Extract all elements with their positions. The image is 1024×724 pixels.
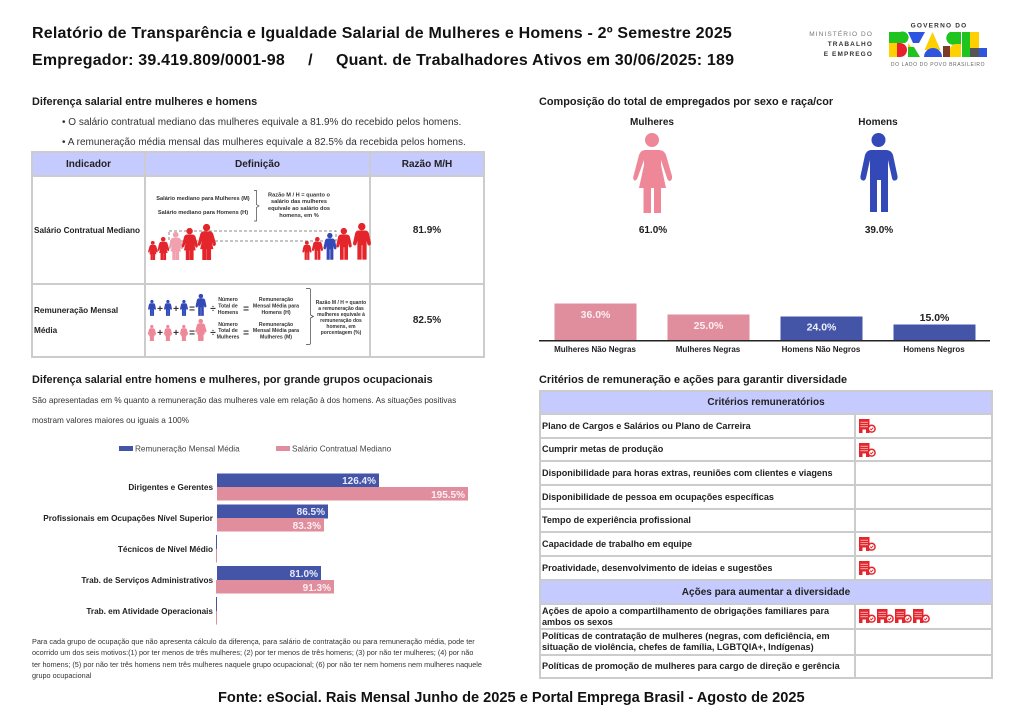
diagram: remuneração média: =: [243, 328, 249, 339]
heading: composição: Composição do total de empregados por sexo e raça/cor: [539, 96, 833, 108]
table: indicadores: Definição: [235, 158, 280, 170]
table: critérios e ações: Proatividade, desenvolvimento de ideias e sugestões: [542, 562, 772, 572]
table: critérios e ações: Políticas de promoção de mulheres para cargo de direção e gerência: [542, 661, 840, 671]
bar chart: composição: Mulheres Negras: [676, 345, 741, 354]
diagram: remuneração média: mulheres equivale à: [317, 312, 365, 318]
bar chart: composição: 24.0%: [807, 322, 837, 334]
bar chart: grupos ocupacionais: Trab. em Atividade Operacionais: [86, 607, 213, 616]
icon: critério proatividade: [859, 561, 876, 575]
diagram: salário mediano: Salário mediano para Mulheres (M): [156, 196, 250, 202]
bar chart: grupos ocupacionais: 126.4%: [342, 476, 376, 487]
table: indicadores: 82.5%: [413, 315, 441, 326]
bar chart: composição: [539, 304, 990, 354]
diagram: remuneração média: porcentagem (%): [321, 330, 362, 336]
diagram: remuneração média: Razão M / H = quanto: [316, 300, 366, 306]
diagram: remuneração média: Número: [218, 322, 238, 328]
table: critérios e ações: Disponibilidade de pessoa em ocupações específicas: [542, 492, 774, 502]
heading: diferença por grupos: Diferença salarial entre homens e mulheres, por grande grupos ocupacionais: [32, 374, 433, 386]
icon: critério capacidade: [859, 537, 876, 551]
diagram: salário mediano: salário das mulheres: [271, 199, 327, 205]
table: critérios e ações: Cumprir metas de produção: [542, 444, 663, 454]
bar chart: composição: Homens Negros: [903, 345, 965, 354]
value: homens: 39.0%: [865, 224, 893, 236]
logo: ministério: E EMPREGO: [824, 51, 873, 58]
label: mulheres: Mulheres: [630, 116, 674, 128]
description: São apresentadas em % quanto a remuneração das mulheres vale em relação à dos homens. As situações positivas: [32, 396, 456, 405]
diagram: remuneração média: Mensal Média para: [253, 304, 299, 310]
diagram: remuneração média: +: [157, 304, 163, 315]
diagram: remuneração média: Remuneração: [259, 322, 293, 328]
diagram: salário mediano: Salário mediano para Homens (H): [158, 210, 248, 216]
table: indicadores: Remuneração Mensal: [34, 306, 118, 314]
diagram: remuneração média: Número: [218, 297, 238, 303]
logo: governo do brasil: [889, 22, 987, 68]
bar chart: grupos ocupacionais: 86.5%: [297, 507, 325, 518]
diagram: remuneração média: =: [189, 304, 195, 315]
bar chart: grupos ocupacionais: [43, 474, 468, 624]
heading: diferença salarial: Diferença salarial entre mulheres e homens: [32, 96, 257, 108]
table: indicadores: Razão M/H: [402, 158, 452, 170]
table: critérios e ações: Políticas de contratação de mulheres (negras, com deficiência, em situação de violência, chefes de família, LGBTQIA+, Indígenas): [542, 631, 830, 652]
label: homens: Homens: [858, 116, 898, 128]
table: indicadores: Salário Contratual Mediano: [34, 226, 140, 234]
table: critérios e ações: Plano de Cargos e Salários ou Plano de Carreira: [542, 420, 751, 430]
logo: governo do brasil: GOVERNO DO: [911, 22, 967, 30]
bar chart: grupos ocupacionais: Técnicos de Nível Médio: [118, 545, 213, 554]
diagram: remuneração média: Homens: [218, 310, 238, 316]
bar chart: composição: Mulheres Não Negras: [554, 345, 636, 354]
icons: ações de apoio: [859, 609, 930, 623]
logo: governo do brasil: DO LADO DO POVO BRASILEIRO: [891, 62, 985, 68]
bar chart: grupos ocupacionais: 195.5%: [431, 490, 465, 501]
diagram: remuneração média: +: [173, 328, 179, 339]
source: Fonte: eSocial. Rais Mensal Junho de 2025 e Portal Emprega Brasil - Agosto de 2025: [218, 690, 805, 706]
logo: ministério: TRABALHO: [828, 41, 873, 48]
table: critérios e ações: Critérios remuneratórios: [707, 397, 825, 408]
diagram: remuneração média: Mensal Média para: [253, 328, 299, 334]
diagram: remuneração média: Mulheres (M): [260, 334, 292, 340]
heading: critérios: Critérios de remuneração e ações para garantir diversidade: [539, 374, 847, 386]
bullet 2: • A remuneração média mensal das mulheres equivale a 82.5% da recebida pelos homens.: [62, 136, 466, 148]
diagram: salário mediano: equivale ao salário dos: [268, 206, 330, 212]
diagram: remuneração média: homens, em: [326, 324, 356, 330]
logo: ministério: [809, 30, 873, 58]
diagram: salário mediano: [148, 190, 371, 260]
table: indicadores: Indicador: [66, 158, 111, 170]
diagram: remuneração média: [148, 288, 366, 345]
diagram: remuneração média: =: [189, 328, 195, 339]
table: critérios e ações: Disponibilidade para horas extras, reuniões com clientes e viagens: [542, 468, 833, 478]
description: [32, 396, 456, 425]
bar chart: grupos ocupacionais: 81.0%: [290, 569, 318, 580]
icon: mulher: [633, 133, 672, 213]
table: indicadores: 81.9%: [413, 224, 441, 236]
table: critérios e ações: Capacidade de trabalho em equipe: [542, 538, 692, 548]
table: critérios e ações: [539, 390, 993, 679]
diagram: salário mediano: homens, em %: [279, 213, 319, 219]
table: indicadores: Média: [34, 326, 57, 334]
diagram: salário mediano: Razão M / H = quanto o: [268, 192, 330, 198]
bar chart: grupos ocupacionais: Trab. de Serviços Administrativos: [81, 576, 213, 585]
bar chart: composição: 36.0%: [581, 309, 611, 321]
bar chart: grupos ocupacionais: 83.3%: [293, 521, 321, 532]
legend: Remuneração Mensal Média: [135, 444, 240, 453]
diagram: remuneração média: Mulheres: [217, 334, 239, 340]
diagram: remuneração média: =: [243, 304, 249, 315]
table: critérios e ações: Tempo de experiência profissional: [542, 515, 691, 525]
diagram: remuneração média: Homens (H): [261, 310, 291, 316]
employer line: Empregador: 39.419.809/0001-98 / Quant. de Trabalhadores Ativos em 30/06/2025: 189: [32, 52, 734, 69]
legend: Salário Contratual Mediano: [292, 444, 392, 453]
diagram: remuneração média: a remuneração das: [318, 306, 364, 312]
diagram: remuneração média: Total de: [218, 304, 238, 310]
description: mostram valores maiores ou iguais a 100%: [32, 416, 189, 425]
footnote: Para cada grupo de ocupação que não apresenta cálculo da diferença, para salário de contratação ou para remuneração média, pode ter ocorrido um dos seis motivos:(1) por ter menos de três mulheres; (2) por ter menos de três homens; (3) por não ter mulheres; (4) por não ter homens; (5) por não ter três homens nem três mulheres naquele grupo ocupacional; (6) por não ter nem homens nem mulheres naquele grupo ocupacional: [32, 637, 482, 680]
diagram: remuneração média: remuneração dos: [320, 318, 362, 324]
table: critérios e ações: Ações para aumentar a diversidade: [682, 586, 850, 598]
diagram: remuneração média: Total de: [218, 328, 238, 334]
diagram: remuneração média: Remuneração: [259, 297, 293, 303]
bar chart: grupos ocupacionais: 91.3%: [303, 583, 331, 594]
logo: ministério: MINISTÉRIO DO: [809, 31, 873, 38]
bar chart: grupos ocupacionais: Profissionais em Ocupações Nível Superior: [43, 514, 214, 523]
bar chart: composição: 15.0%: [920, 312, 950, 324]
title: Relatório de Transparência e Igualdade Salarial de Mulheres e Homens - 2º Semestre 2025: [32, 25, 732, 42]
bar chart: grupos ocupacionais: Dirigentes e Gerentes: [128, 483, 213, 492]
table: critérios e ações: Ações de apoio a compartilhamento de obrigações familiares para ambos os sexos: [542, 606, 829, 626]
legend: [119, 444, 392, 453]
value: mulheres: 61.0%: [639, 224, 667, 236]
icon: homem: [860, 133, 898, 212]
bar chart: composição: 25.0%: [694, 320, 724, 332]
diagram: remuneração média: ÷: [210, 328, 216, 339]
bullet 1: • O salário contratual mediano das mulheres equivale a 81.9% do recebido pelos homens.: [62, 116, 461, 128]
icon: critério plano de cargos: [859, 419, 876, 433]
icon: critério metas: [859, 443, 876, 457]
diagram: remuneração média: +: [173, 304, 179, 315]
bar chart: composição: Homens Não Negros: [782, 345, 861, 354]
table: indicadores: [31, 151, 485, 358]
diagram: remuneração média: ÷: [210, 304, 216, 315]
diagram: remuneração média: +: [157, 328, 163, 339]
